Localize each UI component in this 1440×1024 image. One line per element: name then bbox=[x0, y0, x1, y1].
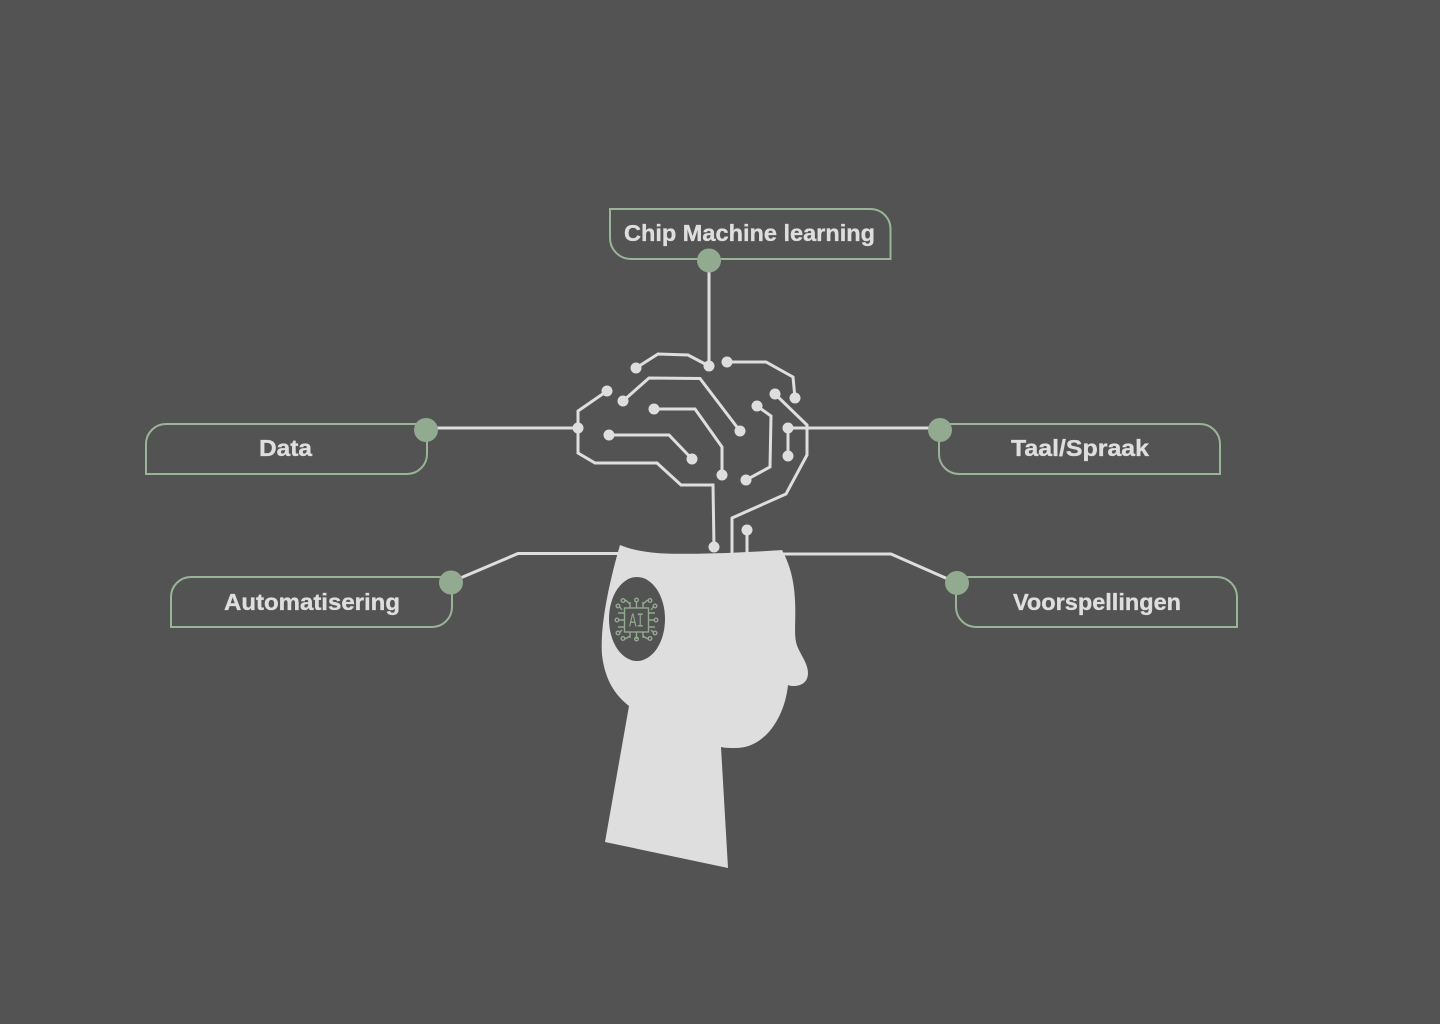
label: Data bbox=[146, 418, 438, 474]
brain circuit bbox=[572, 354, 807, 553]
label: Chip Machine learning: Chip Machine learning bbox=[624, 220, 875, 246]
chip text: AI bbox=[629, 610, 644, 632]
label: Voorspellingen: Voorspellingen bbox=[1013, 589, 1181, 615]
label: Taal/Spraak: Taal/Spraak bbox=[1011, 435, 1149, 461]
label: Automatisering: Automatisering bbox=[224, 589, 400, 615]
label: Taal/Spraak bbox=[928, 418, 1220, 474]
label: Chip Machine learning bbox=[610, 209, 890, 272]
head silhouette bbox=[602, 545, 808, 868]
label: Voorspellingen bbox=[945, 571, 1237, 627]
label: Data: Data bbox=[259, 435, 312, 461]
AI chip badge bbox=[609, 577, 665, 661]
label: Automatisering bbox=[171, 570, 463, 627]
connector lines from labels to brain bbox=[426, 260, 957, 583]
icon: chip circuit bbox=[615, 598, 658, 641]
